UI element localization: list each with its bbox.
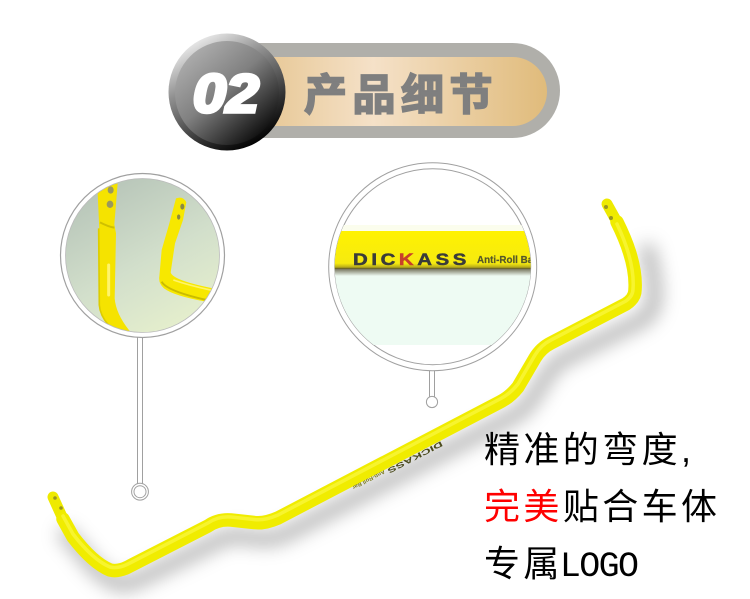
callout leader bbox=[426, 371, 438, 408]
bar mounting holes bbox=[53, 205, 613, 510]
header pill bbox=[200, 43, 560, 138]
section header badge bbox=[168, 34, 560, 150]
brand wordmark: DIC KASS bbox=[353, 250, 470, 269]
bar tube bbox=[53, 204, 635, 571]
bar shadow bbox=[62, 245, 654, 584]
section number: 02 bbox=[193, 64, 259, 124]
detail callout: bar ends bbox=[60, 173, 225, 500]
bar printed subtitle: Anti-Roll Bar bbox=[351, 468, 386, 490]
callout ring bbox=[60, 174, 224, 338]
close-up photo: logo print bbox=[330, 225, 537, 345]
callout leader bbox=[132, 337, 148, 500]
caption line 1: 精准的弯度, bbox=[484, 429, 694, 470]
detail callout: logo print bbox=[329, 163, 537, 408]
bar printed logo: DICKASS bbox=[386, 439, 444, 475]
caption line 2: 完美贴合车体 bbox=[484, 486, 720, 527]
caption line 3: 专属LOGO bbox=[484, 543, 637, 587]
caption text bbox=[484, 429, 720, 587]
number ball bbox=[168, 34, 286, 150]
section title: 产品细节 bbox=[304, 72, 498, 120]
product name: Anti-Roll Bar bbox=[477, 255, 537, 266]
sway bar product photo bbox=[53, 204, 654, 584]
callout ring bbox=[329, 163, 537, 371]
close-up photo: bar ends bbox=[66, 178, 220, 332]
